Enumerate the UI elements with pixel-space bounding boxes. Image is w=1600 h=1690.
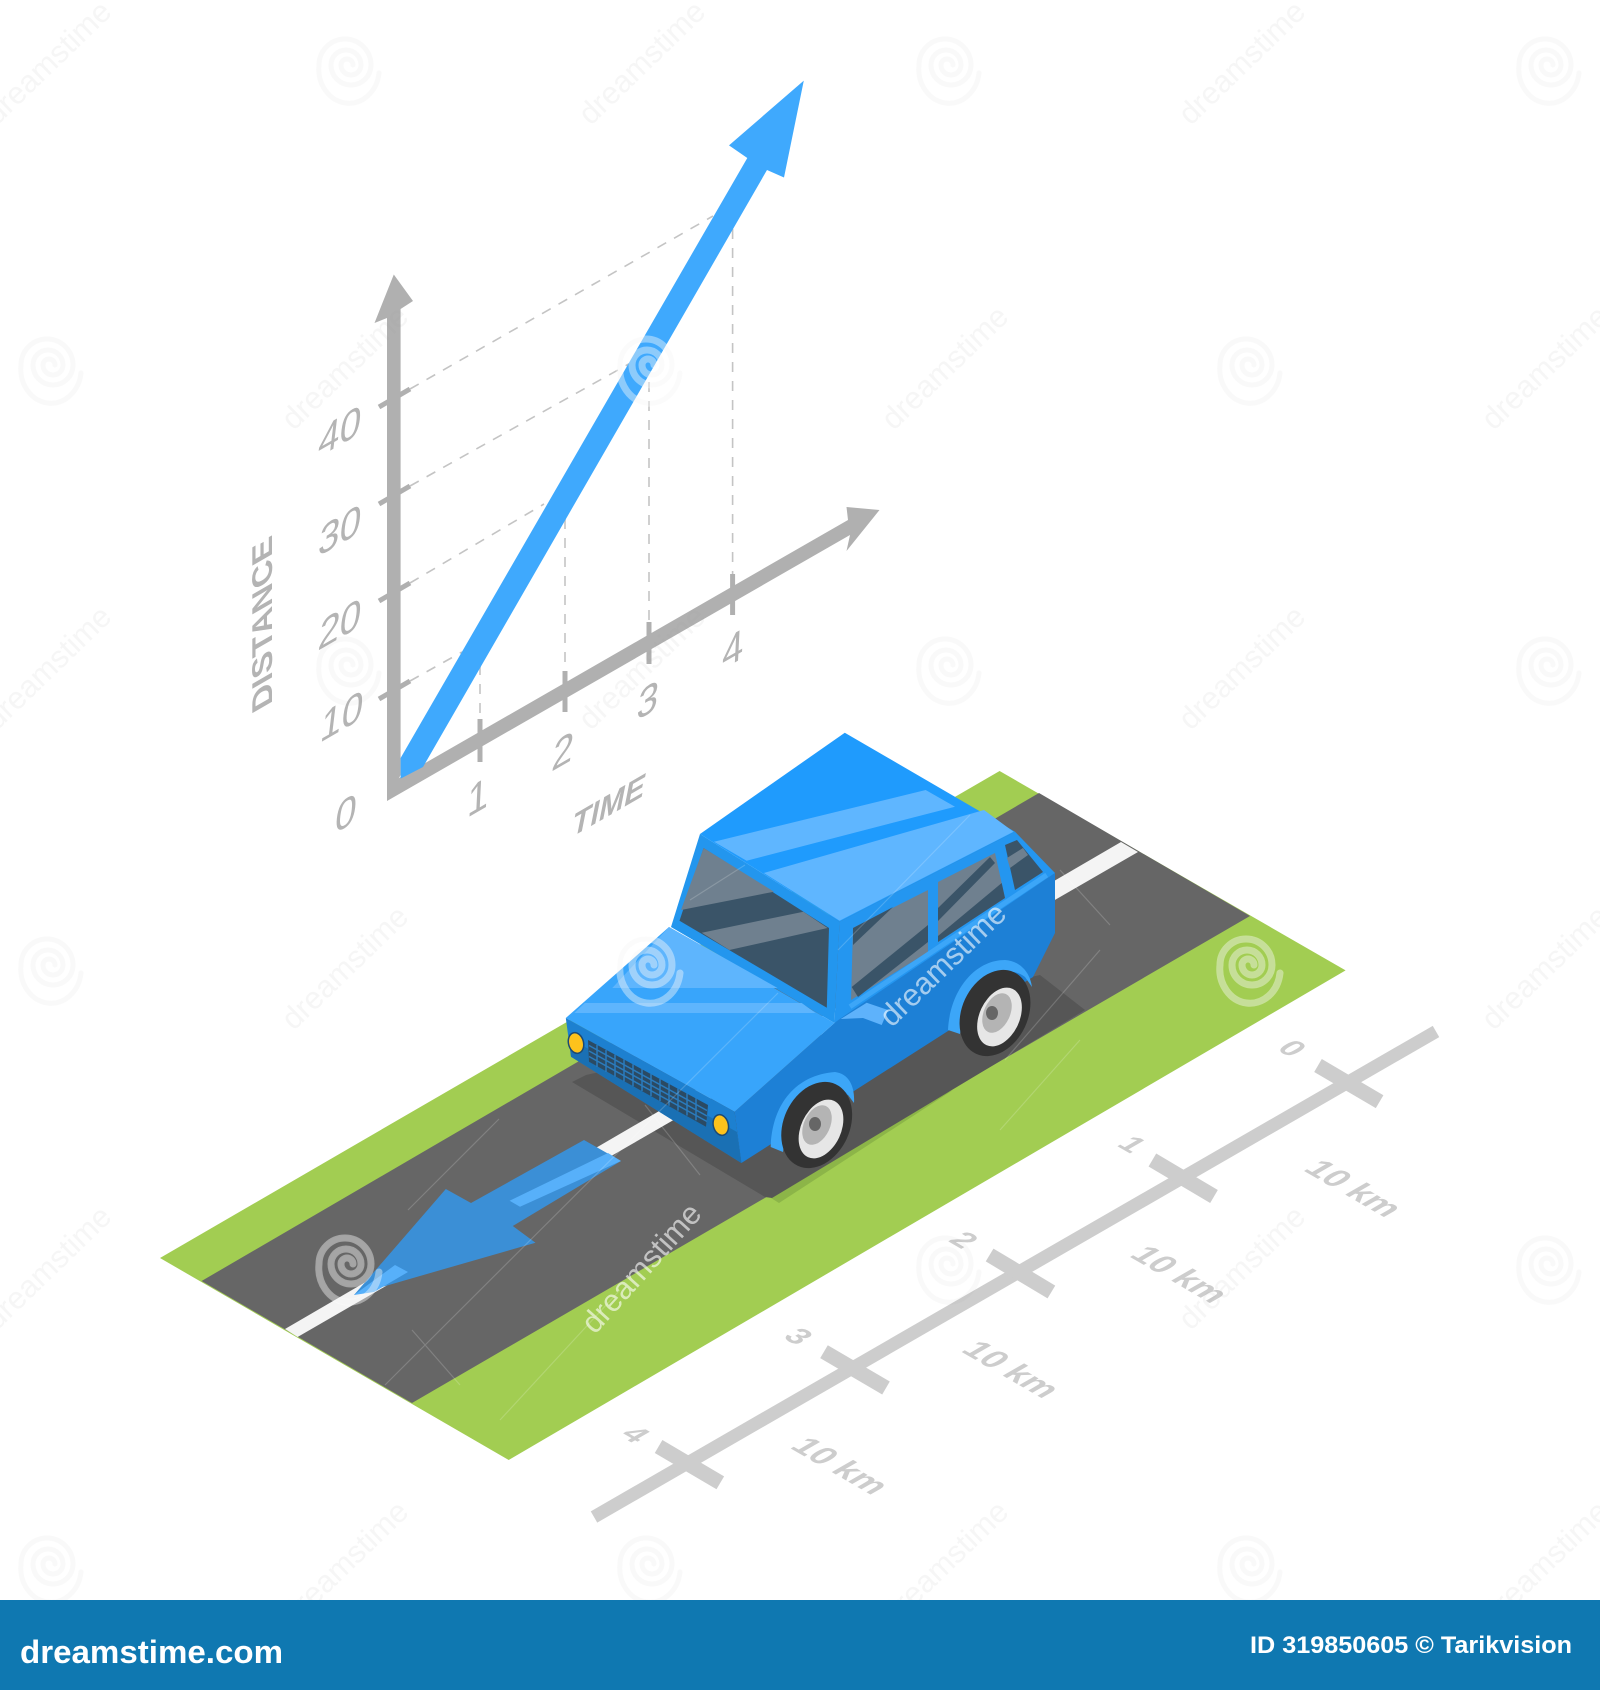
axis ticks	[379, 389, 733, 762]
headlights	[566, 1031, 731, 1137]
blue distance line arrow	[401, 81, 804, 779]
distance axis title: DISTANCE	[246, 530, 278, 719]
scale line	[594, 1032, 1436, 1517]
watermark words: dreamstime	[274, 1494, 415, 1631]
time axis title: TIME	[569, 765, 649, 846]
distance-time graph	[246, 81, 880, 846]
watermark words: dreamstime	[874, 299, 1015, 436]
car shadow on road	[572, 975, 1085, 1198]
windshield	[680, 848, 829, 1008]
watermark cross lines	[385, 815, 1110, 1420]
side mirror	[841, 1003, 888, 1025]
rear wheel arch	[948, 960, 1032, 1034]
scale point numbers: 2	[941, 1227, 987, 1253]
car upper side body	[834, 832, 1055, 1023]
lane marking	[285, 842, 1138, 1337]
distance tick numbers: 30	[316, 494, 364, 567]
distance tick numbers: 40	[316, 395, 364, 468]
grass strip	[160, 771, 1346, 1460]
segment length labels: 10 km	[953, 1336, 1069, 1403]
front wheel arch	[771, 1072, 854, 1152]
scale point numbers: 3	[776, 1323, 821, 1349]
time axis with arrow	[387, 507, 880, 801]
watermark words: dreamstime	[872, 896, 1013, 1033]
distance scale ruler	[594, 1032, 1436, 1517]
segment length labels: 10 km	[782, 1432, 898, 1500]
front face	[566, 1018, 741, 1163]
windshield pillars	[671, 834, 840, 1023]
time tick numbers: 1	[466, 767, 490, 828]
scale point numbers: 0	[1270, 1035, 1315, 1061]
rear wheel	[946, 958, 1044, 1068]
watermark words: dreamstime	[274, 299, 415, 436]
car	[566, 733, 1055, 1180]
watermark words: dreamstime	[1171, 1199, 1312, 1336]
scale point numbers: 4	[613, 1421, 659, 1448]
time tick numbers: 3	[634, 670, 661, 731]
distance tick numbers: 0	[332, 783, 359, 844]
side windows	[851, 840, 1043, 1000]
distance axis with arrow	[374, 274, 413, 801]
road scene	[160, 771, 1346, 1460]
segment length labels: 10 km	[1295, 1155, 1412, 1222]
radiator grille	[588, 1040, 708, 1127]
car lower side body	[735, 873, 1055, 1163]
asphalt road	[202, 793, 1250, 1403]
watermark words: dreamstime	[574, 1196, 708, 1340]
direction arrow on road	[354, 1140, 621, 1295]
front wheel	[768, 1070, 866, 1180]
front bumper shade	[569, 1038, 741, 1163]
watermark words: dreamstime	[874, 1494, 1015, 1631]
scale cross ticks	[659, 1066, 1380, 1483]
segment length labels	[782, 1155, 1412, 1500]
watermark words: dreamstime	[571, 599, 712, 736]
scale point numbers	[613, 1035, 1315, 1448]
dashed guide lines	[410, 216, 733, 719]
time tick numbers: 2	[549, 721, 576, 782]
hood	[566, 927, 834, 1112]
watermark words: dreamstime	[1171, 599, 1312, 736]
time tick numbers: 4	[721, 619, 745, 680]
scale point numbers: 1	[1110, 1131, 1155, 1157]
footer bar	[0, 1600, 1600, 1690]
roof	[700, 733, 1015, 922]
time tick numbers	[466, 619, 745, 828]
distance tick numbers	[316, 395, 366, 844]
footer brand: dreamstime.com	[20, 1634, 283, 1670]
segment length labels: 10 km	[1121, 1241, 1238, 1308]
watermark words: dreamstime	[274, 899, 415, 1036]
footer image id and credit: ID 319850605 © Tarikvision	[1250, 1632, 1572, 1659]
car shadow on grass	[771, 1090, 953, 1203]
belt moulding	[850, 875, 1047, 1007]
distance tick numbers: 20	[316, 588, 364, 661]
distance tick numbers: 10	[318, 680, 366, 753]
